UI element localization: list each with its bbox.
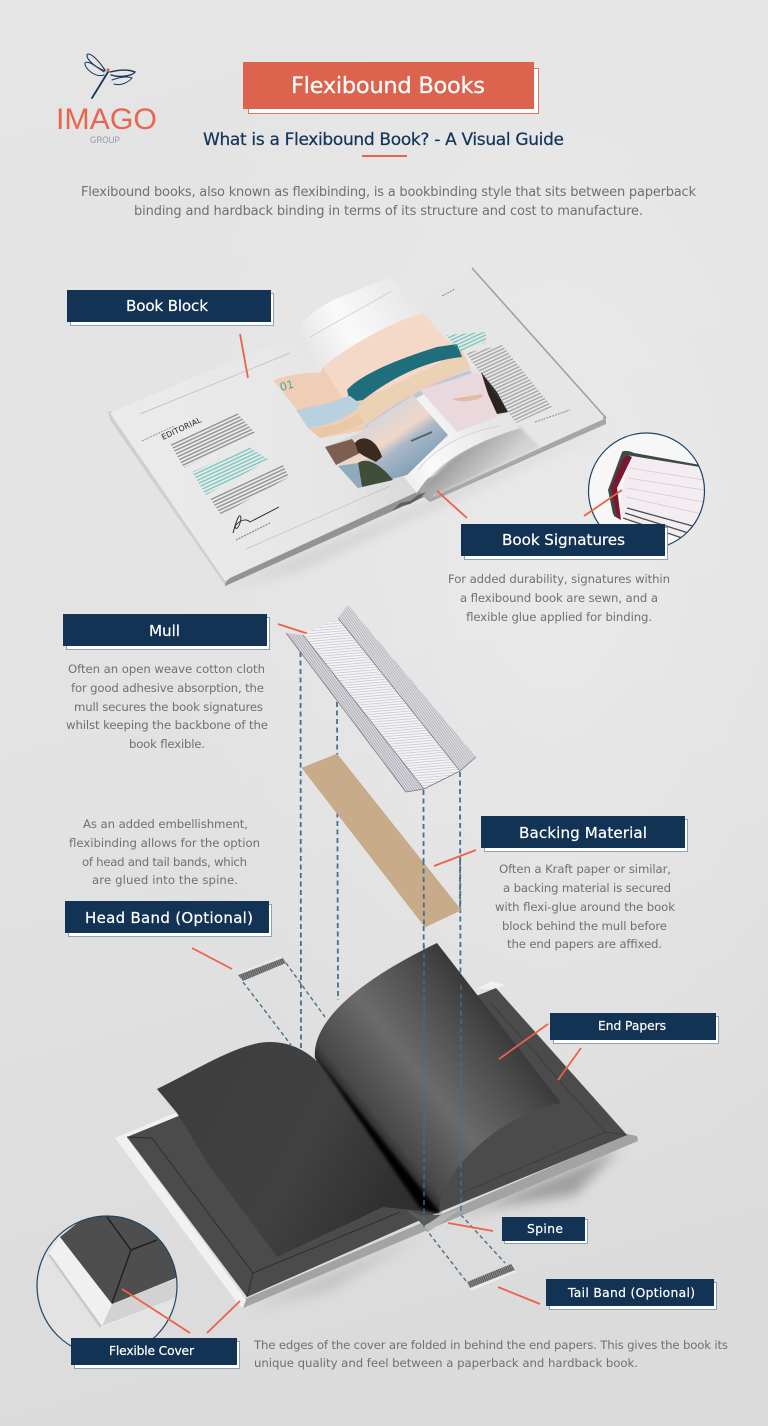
illustration: backing material — [302, 754, 461, 927]
label: Mull: Mull — [149, 622, 180, 640]
curved right page — [300, 277, 520, 493]
leader: Book Block — [240, 334, 248, 378]
label: Book Block: Book Block — [126, 297, 208, 315]
label: End Papers — [550, 1013, 718, 1044]
page thickness — [225, 416, 606, 586]
text: Flexible Cover: The edges of the cover are folded in behind the end papers. This gives the book its — [253, 1338, 728, 1352]
label: Head Band: Head Band (Optional) — [85, 909, 253, 927]
icon: dragonfly — [85, 54, 135, 98]
text: Backing Material: a backing material is secured — [503, 881, 671, 895]
text: Backing Material: block behind the mull before — [502, 919, 667, 933]
icon: tail band — [467, 1264, 516, 1291]
torn spine — [392, 492, 426, 511]
end paper left — [157, 1042, 439, 1257]
book shadow — [225, 425, 610, 588]
text: head and tail bands: of head and tail bands, which — [82, 855, 247, 869]
text: Book Signatures — [448, 572, 670, 624]
illustration: open book block: 01 — [278, 378, 295, 394]
text: Flexible Cover — [253, 1338, 728, 1370]
illustration: mull cloth — [286, 605, 476, 792]
leaders: End Papers — [499, 1024, 581, 1080]
inset: cover corner close-up — [36, 1215, 178, 1346]
back right page — [415, 268, 604, 497]
label: Flexible Cover — [71, 1338, 240, 1368]
illustration: open book block — [108, 268, 610, 588]
icon: head band — [238, 956, 286, 982]
right page text — [446, 332, 486, 352]
subtitle: What is a Flexibound Book? - A Visual Guide — [203, 130, 564, 150]
label: Book Signatures: Book Signatures — [502, 531, 625, 549]
text: Mull: mull secures the book signatures — [74, 700, 263, 714]
grey base edge — [243, 1134, 638, 1308]
gutter shadow — [316, 1057, 441, 1214]
text: head and tail bands: As an added embellishment, — [83, 817, 248, 831]
end paper right — [315, 943, 561, 1213]
text: Backing Material — [495, 862, 675, 951]
leader: Backing Material — [434, 850, 476, 866]
white cover strips — [115, 1113, 246, 1308]
label: Head Band — [65, 901, 272, 936]
label: Spine: Spine — [527, 1222, 563, 1236]
text: head and tail bands: are glued into the spine. — [92, 873, 238, 887]
dark cover — [127, 988, 627, 1297]
text: Book Signatures: For added durability, signatures within — [448, 572, 670, 586]
illustration: open book with end papers — [115, 943, 638, 1308]
guide lines: dashed drop lines — [243, 652, 505, 1281]
leader: Spine — [448, 1223, 493, 1231]
left page — [110, 342, 417, 581]
raised page shadow — [424, 427, 540, 498]
text: Mull: whilst keeping the backbone of the — [66, 718, 268, 732]
text: Backing Material: the end papers are affixed. — [507, 937, 662, 951]
label: Book Block — [67, 290, 274, 326]
text: Mull: for good adhesive absorption, the — [71, 681, 264, 695]
label: Tail Band: Tail Band (Optional) — [567, 1286, 695, 1300]
leaders: Book Signatures — [437, 490, 622, 518]
spine crease — [405, 1208, 440, 1226]
title — [243, 62, 538, 114]
photo spread base — [273, 313, 471, 438]
text: Book Signatures: flexible glue applied for binding. — [466, 610, 652, 624]
text: Mull — [66, 662, 268, 751]
leaders: Flexible Cover — [122, 1289, 240, 1333]
label: Flexible Cover: Flexible Cover — [109, 1344, 195, 1358]
seascape photo with woman — [325, 395, 448, 488]
intro text: binding and hardback binding in terms of its structure and cost to manufacture. — [134, 204, 643, 219]
small pink photo — [420, 372, 508, 432]
book shadow — [445, 1148, 620, 1222]
text: head and tail bands: flexibinding allows for the option — [69, 836, 260, 850]
logo: Imago Group — [56, 54, 157, 146]
inset: signatures close-up — [588, 433, 706, 549]
text: Flexible Cover: unique quality and feel between a paperback and hardback book. — [254, 1356, 638, 1370]
label: Backing Material — [481, 816, 688, 852]
leader: Head Band — [192, 948, 232, 969]
leader: Tail Band — [498, 1287, 540, 1304]
label: End Papers: End Papers — [598, 1019, 666, 1033]
peach photo band — [323, 313, 462, 402]
cover folds — [152, 1138, 400, 1273]
logo: Imago Group: IMAGO — [56, 103, 157, 136]
text: Book Signatures: a flexibound book are sewn, and a — [460, 591, 658, 605]
left page text: EDITORIAL — [160, 415, 203, 442]
text: Backing Material: Often a Kraft paper or similar, — [499, 862, 671, 876]
title: Flexibound Books — [291, 73, 485, 99]
label: Book Signatures — [461, 524, 668, 560]
logo: Imago Group: GROUP — [90, 135, 120, 146]
wave — [347, 344, 462, 402]
label: Tail Band — [546, 1279, 716, 1310]
intro text: Flexibound books, also known as flexibinding, is a bookbinding style that sits between paperback — [81, 185, 696, 200]
text: Backing Material: with flexi-glue around the book — [495, 900, 675, 914]
leader: Mull — [278, 624, 321, 638]
re-drawn drop lines over backing — [424, 860, 460, 927]
text: Mull: book flexible. — [129, 737, 205, 751]
intro text — [81, 185, 696, 219]
label: Mull — [63, 614, 270, 650]
drop lines over book — [424, 945, 461, 1227]
label: Spine — [502, 1217, 588, 1244]
text: Mull: Often an open weave cotton cloth — [68, 662, 265, 676]
text: head and tail bands — [69, 817, 260, 887]
label: Backing Material: Backing Material — [519, 824, 647, 842]
